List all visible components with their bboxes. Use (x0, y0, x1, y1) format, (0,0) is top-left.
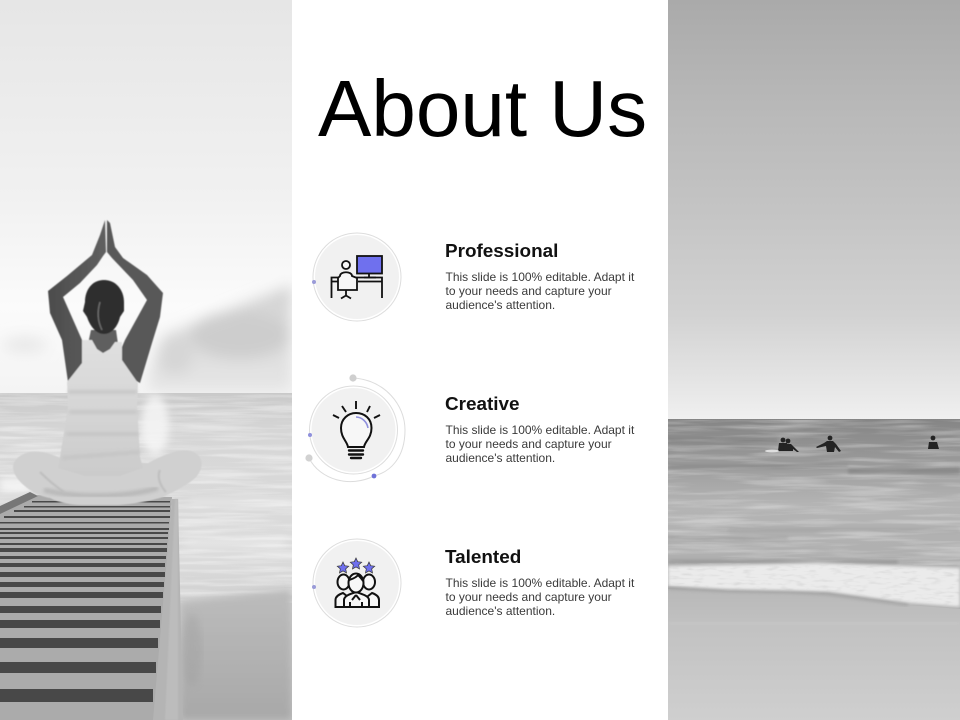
monitor (357, 256, 382, 278)
left arm (48, 220, 106, 382)
sky (668, 0, 960, 420)
bulb base (349, 450, 363, 458)
text block: professional: Professional (445, 241, 558, 262)
text block: professional: This slide is 100% editable. Adapt it (446, 270, 634, 284)
title: About Us (318, 64, 647, 153)
icon: professional at desk (312, 232, 402, 322)
tank top (58, 340, 143, 476)
surfers (778, 436, 939, 452)
text block: professional (445, 241, 634, 312)
wave bands (668, 437, 960, 564)
clouds (3, 285, 292, 392)
woman figure (13, 220, 202, 505)
wet sand patch (180, 588, 292, 720)
circle badge (312, 539, 401, 627)
sand (668, 589, 960, 720)
text block: creative: This slide is 100% editable. Adapt it (446, 423, 634, 437)
text block: talented (445, 547, 634, 618)
desk (332, 278, 382, 298)
pier (0, 492, 183, 720)
text block: talented: This slide is 100% editable. Adapt it (446, 576, 634, 590)
text block: talented: Talented (445, 547, 521, 568)
icon: talented team (312, 538, 402, 628)
text block: creative: to your needs and capture your (446, 437, 612, 451)
right arm (107, 220, 163, 383)
sea (0, 393, 292, 720)
circle badge with orbit (305, 374, 405, 482)
water (668, 419, 960, 609)
sky (0, 0, 292, 394)
circle badge (312, 233, 401, 321)
text block: professional: audience's attention. (446, 298, 555, 312)
photo: surfers in the sea (668, 0, 960, 720)
text block: creative (445, 394, 634, 465)
photo: woman meditating on pier (0, 0, 292, 720)
text block: professional: to your needs and capture your (446, 284, 612, 298)
person on chair (338, 261, 357, 298)
neck and upper back (88, 330, 118, 354)
legs (13, 450, 202, 505)
sea highlights (0, 395, 292, 545)
light rays (333, 401, 380, 418)
text block: talented: audience's attention. (446, 604, 555, 618)
three people (336, 574, 379, 607)
bulb highlight (356, 417, 368, 428)
text block: creative: Creative (445, 394, 520, 415)
stars (337, 558, 375, 573)
shore foam (668, 563, 960, 607)
head (83, 280, 124, 334)
bulb (341, 413, 372, 447)
text block: creative: audience's attention. (446, 451, 555, 465)
icon: light bulb (306, 374, 406, 482)
text block: talented: to your needs and capture your (446, 590, 612, 604)
